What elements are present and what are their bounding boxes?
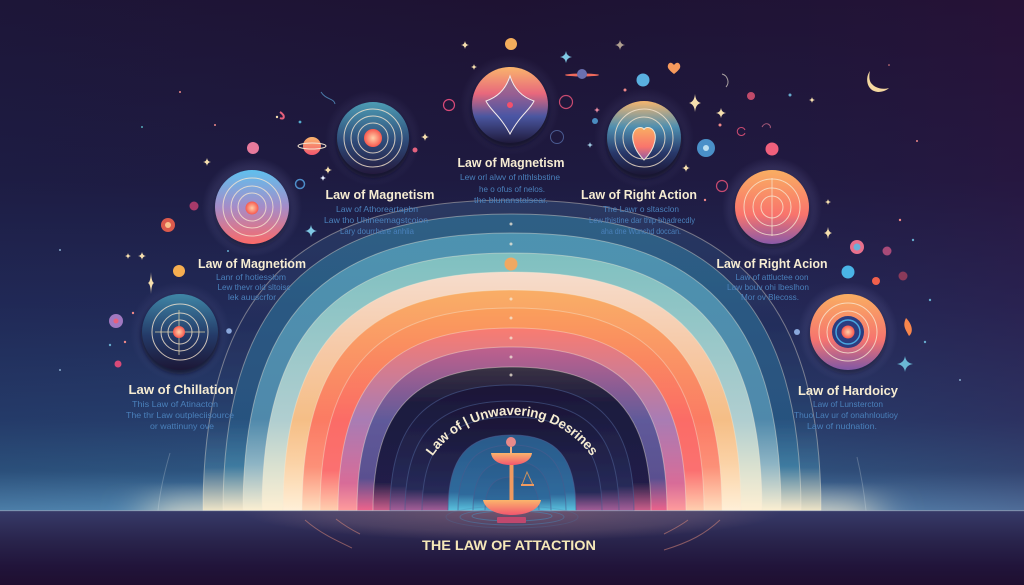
panel: Law of Chillation: Law of Chillation <box>128 382 234 397</box>
panel: Law of Right Acion: Mor ov Blecoss. <box>741 292 799 302</box>
icon: ufo planet <box>565 69 599 79</box>
panel: Law of Chillation: The thr Law outpleciisource <box>126 410 234 420</box>
panel: Law of Hardoicy: Thuo Lav ur of onahnloutioy <box>794 410 899 420</box>
panel: Law of Magnetism left: Law of Magnetism <box>326 187 434 202</box>
panel: Law of Magnetiom <box>198 157 306 302</box>
title: THE LAW OF ATTACTION <box>422 537 596 553</box>
panel: Law of Right Acion: Law of Right Acion <box>716 256 828 271</box>
icon: heart <box>668 63 680 74</box>
panel: Law of Magnetiom: Lanr of hotiesslom <box>216 272 286 282</box>
panel: Law of Hardoicy <box>794 282 899 431</box>
decorative stars and dots <box>59 40 961 391</box>
panel: Law of Right Action center <box>581 88 697 236</box>
panel: Law of Magnetism center <box>458 55 564 205</box>
panel: Law of Magnetism left: Law tho Uhineemagstcoion <box>324 215 428 225</box>
panel: Law of Hardoicy: Law of Lunstercton <box>813 399 883 409</box>
icon: planet <box>298 137 326 155</box>
panel: Law of Chillation: This Law of Atinacton <box>132 399 218 409</box>
floor ripples <box>305 506 720 550</box>
panel: Law of Magnetism center: Lew orl alwv of nlthlsbstine <box>460 172 560 182</box>
curved heading: Law of | Unwavering Desrines <box>426 406 596 456</box>
central rainbow arch <box>203 200 821 511</box>
panel: Law of Magnetism center: he o ofus of nelos. <box>479 184 545 194</box>
icon: flowers and glyphs <box>109 74 913 511</box>
panel: Law of Magnetiom: Law of Magnetiom <box>198 256 306 271</box>
floor <box>0 510 1024 564</box>
panel: Law of Right Action center: aha dne Wunchd doccan. <box>601 226 681 236</box>
panel: Law of Hardoicy: Law of Hardoicy <box>798 383 899 398</box>
icon: balance fountain <box>483 437 541 523</box>
icon: crescent moon <box>867 71 889 92</box>
panel: Law of Hardoicy: Law of nudnation. <box>807 421 877 431</box>
panel: Law of Magnetism left <box>324 90 434 236</box>
panel: Law of Magnetiom: lek auuscrfor <box>228 292 276 302</box>
panel: Law of Magnetism left: Lary dourrhare anhlia <box>340 226 414 236</box>
icon: small badges <box>173 38 880 335</box>
panel: Law of Right Action center: Lew thistine dar thlp bhadrecdly <box>589 215 696 225</box>
panel: Law of Magnetism center: Law of Magnetism <box>458 155 564 170</box>
panel: Law of Chillation <box>126 282 234 431</box>
panel: Law of Magnetism left: Law of Athoreartapbn <box>336 204 418 214</box>
panel: Law of Magnetiom: Lew thevr old sltoisc <box>218 282 291 292</box>
panel: Law of Chillation: or wattinuny ove <box>150 421 214 431</box>
panel: Law of Right Action center: The Lawr o sltasclon <box>603 204 679 214</box>
panel: Law of Right Action center: Law of Right Action <box>581 187 697 202</box>
panel: Law of Right Acion: Law of attluctee oon <box>736 272 809 282</box>
panel: Law of Right Acion <box>716 157 828 302</box>
panel: Law of Right Acion: Law bouv ohi lbeslhon <box>727 282 809 292</box>
panel: Law of Magnetism center: the blunanstalsear. <box>474 195 548 205</box>
